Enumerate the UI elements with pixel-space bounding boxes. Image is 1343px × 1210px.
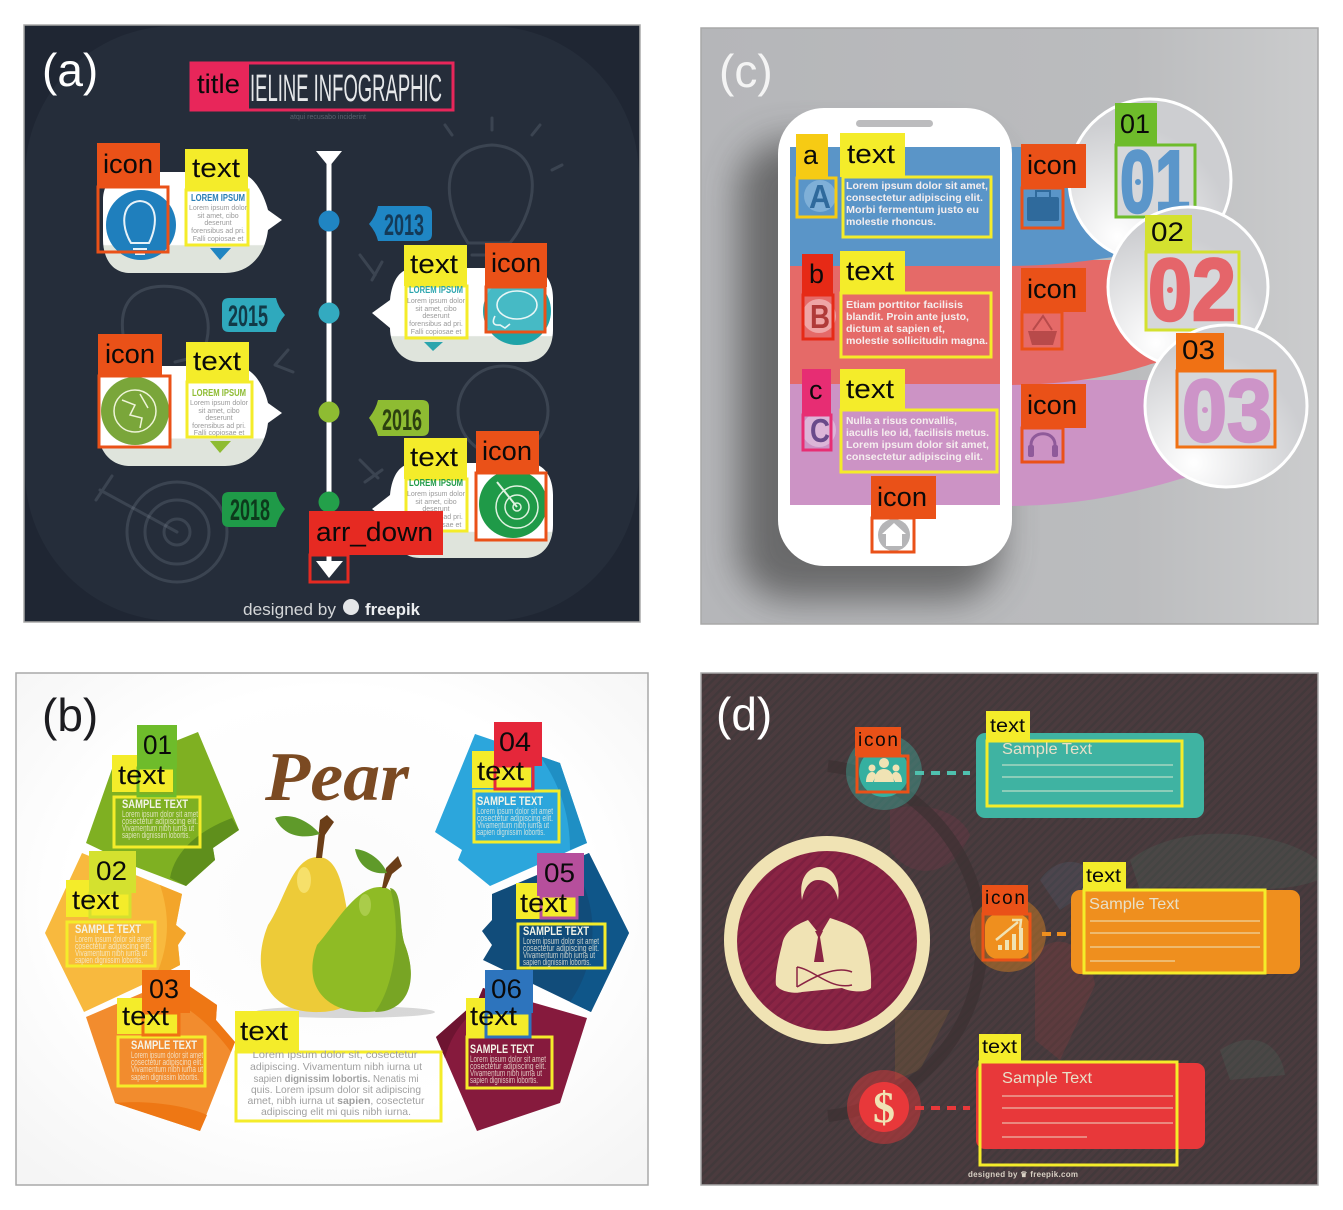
text block 1: forensibus ad pri.: [191, 228, 245, 235]
text block 05 with number: cosectetur adipiscing elit.: [523, 943, 599, 953]
title with label: atqui recusabo inciderint: [290, 114, 366, 121]
text block b: text: [846, 256, 895, 286]
credit: designed by freepik: designed by: [243, 601, 337, 619]
text block 02 with number: [66, 851, 155, 966]
text block 04 with number: Lorem ipsum dolor sit amet: [477, 806, 553, 816]
orange connector: [1042, 932, 1066, 936]
text block 06 with number: SAMPLE TEXT: [470, 1042, 535, 1056]
central text block: quis. Lorem ipsum dolor sit adipiscing: [251, 1084, 421, 1096]
panel: (b) pear infographic: [16, 673, 648, 1185]
red card: [976, 1034, 1205, 1165]
speech bubble 1 (2013): [97, 143, 282, 273]
item c: C: [810, 412, 830, 449]
icon: speech bubbles: icon: [491, 248, 541, 278]
text block 1: Falli copiosae et: [193, 236, 243, 243]
text block 2: deserunt: [422, 313, 450, 320]
text block 3: sit amet, cibo: [198, 408, 240, 415]
panel: (d) business infographic: [701, 673, 1318, 1185]
text block 05 with number: [516, 853, 605, 968]
text block 02 with number: cosectetur adipiscing elit.: [75, 941, 151, 951]
title with label: IELINE INFOGRAPHIC: [250, 68, 442, 110]
icon: target: icon: [482, 436, 532, 466]
item b: b: [809, 259, 824, 289]
text block 04 with number: cosectetur adipiscing elit.: [477, 813, 553, 823]
text block 2: Falli copiosae et: [411, 329, 461, 336]
text block a: Lorem ipsum dolor sit amet,: [846, 180, 988, 192]
text block c: consectetur adipiscing elit.: [846, 451, 983, 463]
portrait medallion: [724, 836, 930, 1044]
text block b: blandit. Proin ante justo,: [846, 311, 969, 323]
circle 02: [1108, 207, 1268, 367]
text block a: [840, 133, 991, 237]
text block 03 with number: text: [122, 1001, 170, 1031]
circle 03: 03: [1182, 335, 1215, 365]
text block 04 with number: sapien dignissim lobortis.: [477, 827, 545, 837]
text block 02 with number: Lorem ipsum dolor sit amet: [75, 934, 151, 944]
text block 01 with number: Lorem ipsum dolor sit amet: [122, 809, 198, 819]
panel letter c: (c): [719, 45, 773, 97]
connector arc: [828, 766, 982, 1116]
text block 3: forensibus ad pri.: [192, 423, 246, 430]
icon: globe: [98, 334, 170, 447]
text block 06 with number: Lorem ipsum dolor sit amet: [470, 1054, 546, 1064]
pear illustration: [255, 815, 435, 1018]
text block 05 with number: SAMPLE TEXT: [523, 924, 590, 938]
text block 01 with number: [112, 725, 200, 847]
item a: a: [803, 140, 819, 170]
icon: basket: icon: [1027, 274, 1077, 304]
text block c: Nulla a risus convallis,: [846, 415, 957, 427]
text block b: [840, 251, 991, 357]
text block 3: Lorem ipsum dolor: [190, 400, 249, 407]
teal node and icon: icon: [858, 730, 898, 751]
year tag 2013: 2013: [384, 209, 424, 242]
year tag 2013: [369, 206, 432, 242]
text block 3: text: [193, 346, 242, 376]
text block 1: Lorem ipsum dolor: [189, 205, 248, 212]
circle 03: [1145, 325, 1307, 487]
background doodles: [96, 118, 562, 582]
segment 02 yellow-orange: [45, 853, 186, 1012]
text block 4: deserunt: [422, 506, 450, 513]
text block 01 with number: text: [118, 760, 166, 790]
orange node and icon: icon: [985, 888, 1025, 909]
red card: Sample Text: [1002, 1070, 1093, 1087]
circle 01: 01: [1120, 132, 1190, 231]
text block 03 with number: Vivamentum nibh iurna ut: [131, 1064, 203, 1074]
ribbon bands to the right: [1005, 147, 1220, 506]
icon: globe: icon: [105, 339, 155, 369]
text block 2: forensibus ad pri.: [409, 321, 463, 328]
timeline dots: [318, 210, 340, 512]
text block 05 with number: Vivamentum nibh iurna ut: [523, 950, 595, 960]
text block 01 with number: 01: [143, 730, 172, 760]
text block 02 with number: sapien dignissim lobortis.: [75, 955, 143, 965]
central text block: sapien dignissim lobortis. Nenatis mi: [254, 1073, 418, 1085]
text block 04 with number: [472, 722, 559, 842]
circle 02: 02: [1151, 217, 1184, 247]
panel letter a: (a): [42, 44, 98, 96]
segment 04 blue: [435, 734, 587, 886]
panel letter b: (b): [42, 689, 98, 741]
text block 1: [185, 149, 248, 245]
timeline line with top marker: [316, 151, 342, 565]
text block 4: forensibus ad pri.: [409, 514, 463, 521]
text block 01 with number: Vivamentum nibh iurna ut: [122, 823, 194, 833]
icon: target: [476, 431, 547, 540]
text block a: consectetur adipiscing elit.: [846, 192, 983, 204]
text block 05 with number: text: [520, 888, 568, 918]
orange card: text: [1086, 866, 1122, 887]
item c: [802, 369, 836, 450]
item a: [796, 134, 836, 217]
text block 4: Lorem ipsum dolor: [407, 491, 466, 498]
text block 03 with number: sapien dignissim lobortis.: [131, 1072, 199, 1082]
red node and dollar icon: [847, 1070, 921, 1144]
text block a: molestie rhoncus.: [846, 216, 936, 228]
arrow down with label: arr_down: [316, 517, 433, 547]
text block a: text: [847, 139, 896, 169]
screen band: red: [790, 266, 1000, 384]
text block 06 with number: 06: [491, 974, 522, 1004]
central text block: Lorem ipsum dolor sit, cosectetur: [252, 1049, 418, 1061]
icon: basket: [1021, 268, 1086, 349]
circle 01: [1069, 99, 1231, 261]
year tag 2015: 2015: [228, 300, 268, 333]
text block 2: sit amet, cibo: [415, 306, 457, 313]
circle 02: 02: [1148, 240, 1236, 339]
icon: man silhouette: [776, 867, 871, 993]
text block 01 with number: SAMPLE TEXT: [122, 797, 189, 811]
year tag 2016: 2016: [382, 404, 422, 437]
text block 04 with number: SAMPLE TEXT: [477, 794, 544, 808]
teal node and icon: [846, 727, 922, 810]
item b: B: [810, 298, 830, 335]
orange card: [1071, 862, 1300, 974]
text block c: text: [846, 374, 895, 404]
text block 02 with number: Vivamentum nibh iurna ut: [75, 948, 147, 958]
text block 03 with number: 03: [149, 974, 179, 1004]
text block c: iaculis leo id, facilisis metus.: [846, 427, 989, 439]
icon: light bulb: [97, 143, 176, 260]
text block 1: deserunt: [204, 220, 232, 227]
text block 01 with number: sapien dignissim lobortis.: [122, 830, 190, 840]
red node and dollar icon: $: [873, 1083, 895, 1132]
panel: (c) phone infographic: [701, 28, 1318, 624]
speech bubble 2 (2015): [372, 243, 553, 362]
teal connector: [915, 771, 970, 775]
text block 02 with number: text: [72, 885, 120, 915]
credit: designed by freepik: [243, 599, 421, 619]
text block b: Etiam porttitor facilisis: [846, 299, 963, 311]
text block 03 with number: SAMPLE TEXT: [131, 1038, 198, 1052]
text block 3: Falli copiosae et: [194, 430, 244, 437]
segment 01 green: [86, 732, 239, 886]
text block 01 with number: cosectetur adipiscing elit.: [122, 816, 198, 826]
text block c: Lorem ipsum dolor sit amet,: [846, 439, 989, 451]
circle 03: 03: [1182, 361, 1272, 460]
text block 03 with number: Lorem ipsum dolor sit amet: [131, 1050, 203, 1060]
red card: text: [982, 1037, 1018, 1058]
icon: speech bubbles: [483, 243, 551, 345]
item a: A: [809, 178, 831, 215]
icon: headphones: icon: [1027, 390, 1077, 420]
central text block: [235, 1011, 441, 1121]
speech bubble 4 (2018): [372, 431, 553, 558]
icon: home button: icon: [877, 482, 927, 512]
text block 2: LOREM IPSUM: [409, 285, 463, 296]
text block 05 with number: Lorem ipsum dolor sit amet: [523, 936, 599, 946]
text block 4: sit amet, cibo: [415, 499, 457, 506]
circle 01: 01: [1120, 109, 1150, 139]
red connector: [915, 1106, 970, 1110]
text block 4: [404, 438, 467, 531]
faint world map: [890, 806, 1318, 1080]
year tag 2018: 2018: [230, 494, 270, 527]
panel letter d: (d): [716, 688, 772, 740]
credit: designed by freepik: freepik: [365, 600, 421, 619]
text block 3: [186, 342, 252, 437]
segment 06 maroon: [436, 988, 587, 1131]
title with label: [191, 62, 453, 121]
arrow down with label: [309, 511, 443, 582]
central text block: adipiscing elit mi quis nibh iurna.: [261, 1106, 411, 1118]
text block 3: deserunt: [205, 415, 233, 422]
teal card: [976, 711, 1204, 818]
text block 06 with number: Vivamentum nibh iurna ut: [470, 1068, 542, 1078]
text block 03 with number: cosectetur adipiscing elit.: [131, 1057, 203, 1067]
text block 06 with number: [466, 970, 552, 1088]
icon: light bulb: icon: [103, 149, 153, 179]
icon: home button: [871, 476, 936, 552]
speech bubble 3 (2016): [98, 334, 282, 466]
text block 1: LOREM IPSUM: [191, 193, 245, 204]
segment 03 orange: [86, 977, 235, 1131]
phone body: [778, 108, 1012, 566]
text block 1: sit amet, cibo: [197, 213, 239, 220]
central text block: adipiscing. Vivamentum nibh iurna ut: [250, 1061, 422, 1073]
orange card: Sample Text: [1089, 896, 1180, 913]
text block 2: [404, 245, 467, 338]
central text block: text: [240, 1016, 289, 1046]
text block 05 with number: 05: [544, 858, 575, 888]
credit: designed by freepik.com: designed by ♛ freepik.com: [968, 1170, 1078, 1179]
item c: c: [809, 375, 822, 405]
icon: briefcase: [1021, 144, 1086, 228]
text block b: molestie sollicitudin magna.: [846, 335, 988, 347]
panel: (a) timeline infographic: [24, 25, 640, 622]
text block 06 with number: text: [470, 1001, 518, 1031]
text block 04 with number: Vivamentum nibh iurna ut: [477, 820, 549, 830]
pear title: Pear: [264, 739, 410, 816]
item b: [802, 254, 836, 339]
text block 2: Lorem ipsum dolor: [407, 298, 466, 305]
year tag 2016: [369, 400, 429, 437]
text block c: [840, 369, 997, 472]
icon: briefcase: icon: [1027, 150, 1077, 180]
text block 04 with number: 04: [499, 727, 531, 757]
text block 02 with number: SAMPLE TEXT: [75, 922, 142, 936]
icon: headphones: [1021, 384, 1086, 462]
text block 05 with number: sapien dignissim lobortis.: [523, 957, 591, 967]
text block b: dictum at sapien et,: [846, 323, 945, 335]
text block 04 with number: text: [477, 756, 525, 786]
screen band: purple: [790, 384, 1000, 505]
text block 03 with number: [117, 970, 205, 1086]
screen band: blue: [790, 147, 1000, 266]
text block 3: LOREM IPSUM: [192, 388, 246, 399]
text block 4: text: [410, 442, 459, 472]
text block 4: LOREM IPSUM: [409, 478, 463, 489]
teal card: text: [990, 716, 1026, 737]
text block 2: text: [410, 249, 459, 279]
segment 05 navy: [482, 853, 629, 1012]
text block 4: Falli copiosae et: [411, 522, 461, 529]
text block a: Morbi fermentum justo eu: [846, 204, 979, 216]
text block 06 with number: cosectetur adipiscing elit.: [470, 1061, 546, 1071]
teal card: Sample Text: [1002, 741, 1093, 758]
text block 06 with number: sapien dignissim lobortis.: [470, 1075, 538, 1085]
orange node and icon: [970, 885, 1046, 972]
text block 02 with number: 02: [96, 856, 127, 886]
text block 1: text: [192, 153, 241, 183]
title with label: title: [197, 69, 240, 99]
central text block: amet, nibh iurna ut sapien, cosectetur: [248, 1095, 425, 1107]
